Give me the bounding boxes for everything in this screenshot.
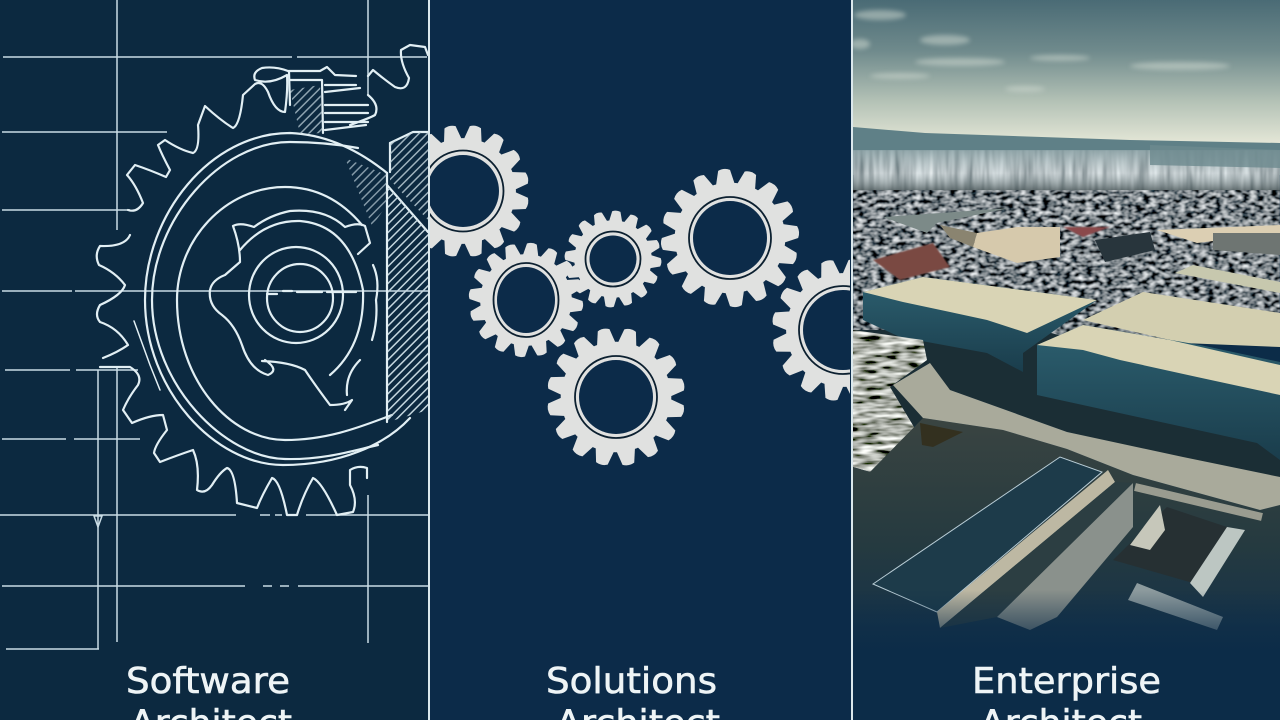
gear 2 [468, 242, 584, 358]
pond [920, 423, 963, 447]
gear 1 [430, 126, 528, 256]
channel [940, 482, 1133, 628]
panel: enterprise architect aerial photo [853, 0, 1280, 630]
road [893, 363, 1280, 510]
gear 3 [564, 210, 662, 308]
warehouse: right front block [1037, 325, 1280, 460]
label: enterprise architect [972, 661, 1161, 720]
dividers [428, 0, 853, 720]
urban sprawl [853, 190, 1280, 340]
label: solutions architect [546, 661, 720, 720]
site edge strip [1135, 487, 1262, 517]
concrete apron [997, 483, 1133, 630]
gear teeth upper outline [127, 67, 356, 211]
gear 4 [660, 168, 800, 308]
long rooftop [873, 457, 1102, 612]
dark base behind warehouses [853, 330, 1280, 480]
top block detail [289, 72, 376, 133]
ground [853, 418, 1280, 614]
gear 5 [772, 260, 850, 400]
icon: blueprint gear [97, 45, 428, 515]
rubble [1130, 505, 1165, 550]
warehouse: left block [863, 277, 1097, 372]
hatched sections [290, 85, 428, 422]
mid-ground buildings [883, 208, 1010, 233]
panel: software architect [0, 0, 429, 720]
gear 6 [548, 328, 684, 466]
bottom fade [894, 593, 1223, 630]
sky [853, 0, 1280, 145]
pipes [1190, 527, 1245, 597]
city skyline [853, 150, 1280, 192]
rooftop side wall [937, 470, 1115, 628]
warehouse: right back rows [1175, 265, 1280, 293]
blueprint construction lines [0, 0, 428, 649]
hub rings [267, 264, 333, 332]
label: software architect: Software [126, 661, 290, 702]
gear teeth lower outline [100, 367, 367, 515]
clouds [850, 10, 1230, 92]
inner gear cam [210, 211, 370, 410]
label: software architect [126, 661, 292, 720]
label: solutions architect: Solutions [546, 661, 717, 702]
stacked structures [853, 330, 928, 472]
lawn [1113, 507, 1227, 583]
gear rims [145, 133, 410, 465]
parked units [1128, 583, 1223, 630]
panel: solutions architect [430, 126, 850, 466]
icon: interlocking white gears [430, 126, 850, 466]
label: enterprise architect: Enterprise [972, 661, 1161, 702]
distant hills [853, 127, 1280, 175]
